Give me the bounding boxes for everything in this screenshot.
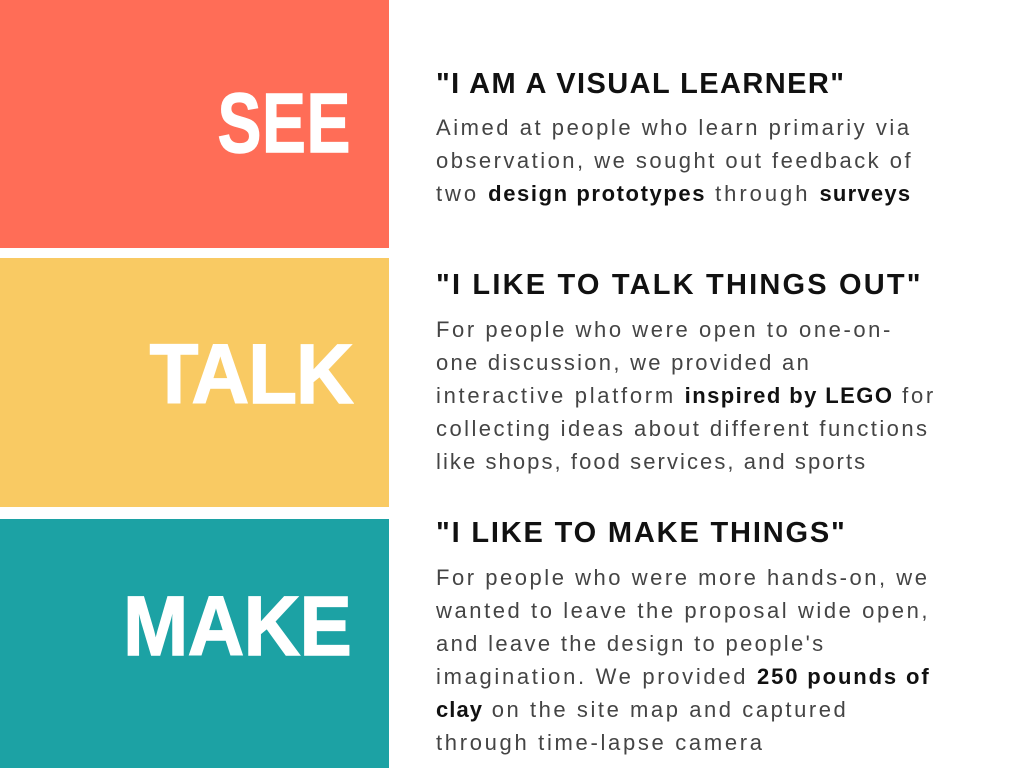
text block: talk things out: collecting ideas about different functions — [436, 416, 929, 441]
text block: talk things out: For people who were open to one-on- — [436, 317, 893, 342]
panel: talk — [0, 258, 389, 507]
text block: talk things out: like shops, food services, and sports — [436, 449, 867, 474]
text block: talk things out — [436, 317, 936, 474]
text block: make things: through time-lapse camera — [436, 730, 765, 755]
heading: visual learner: "I AM A VISUAL LEARNER" — [436, 68, 845, 100]
text block: make things: wanted to leave the proposal wide open, — [436, 598, 930, 623]
text block: make things — [436, 565, 931, 755]
text block: visual learner: observation, we sought out feedback of — [436, 148, 913, 173]
panel: make — [0, 519, 389, 768]
text block: make things: imagination. We provided 250 pounds of — [436, 664, 931, 689]
heading: see: SEE — [218, 76, 351, 170]
text block: talk things out: one discussion, we provided an — [436, 350, 811, 375]
text block: make things: For people who were more hands-on, we — [436, 565, 930, 590]
text block: make things: and leave the design to people's — [436, 631, 825, 656]
heading: make: MAKE — [123, 579, 351, 673]
heading: talk: TALK — [150, 327, 353, 421]
text block: make things: clay on the site map and captured — [436, 697, 848, 722]
text block: talk things out: interactive platform inspired by LEGO for — [436, 383, 936, 408]
text block: visual learner — [436, 115, 913, 206]
heading: talk things out: "I LIKE TO TALK THINGS OUT" — [436, 269, 923, 301]
heading: make things: "I LIKE TO MAKE THINGS" — [436, 517, 847, 549]
text block: visual learner: two design prototypes through surveys — [436, 181, 911, 206]
panel: see — [0, 0, 389, 248]
text block: visual learner: Aimed at people who learn primariy via — [436, 115, 912, 140]
